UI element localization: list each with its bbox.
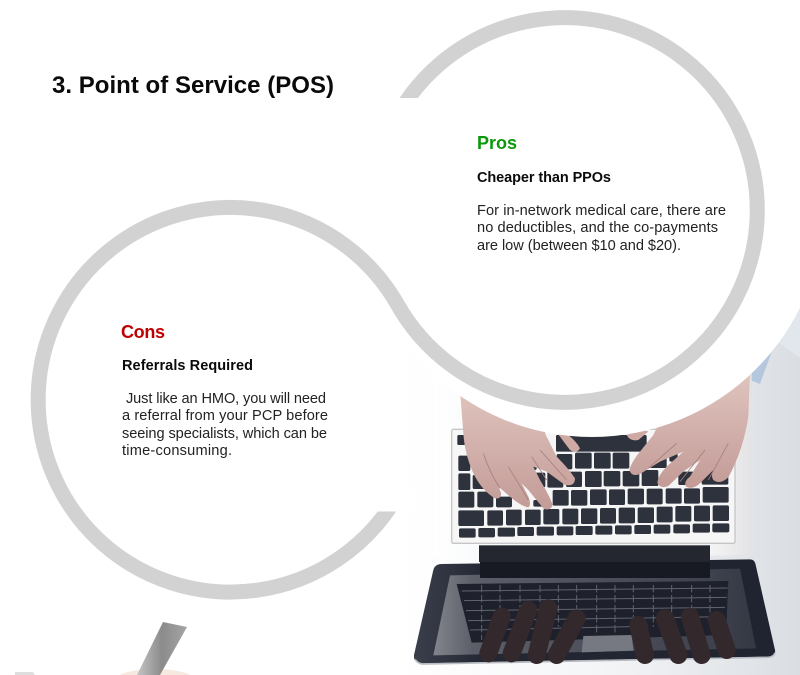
title: 3. Point of Service (POS) — [52, 72, 334, 99]
reflected keyboard — [457, 581, 728, 643]
cons body: time-consuming. — [122, 443, 232, 459]
pros body: no deductibles, and the co-payments — [477, 220, 718, 236]
hinge — [479, 545, 710, 578]
shirt sleeve — [745, 300, 800, 384]
cons body: Just like an HMO, you will need — [126, 391, 326, 407]
cons subheading: Referrals Required — [122, 358, 253, 374]
panel: cons — [121, 322, 328, 459]
desk background — [400, 280, 800, 675]
reflected hands — [488, 608, 727, 655]
panel: pros — [477, 133, 726, 254]
pros subheading: Cheaper than PPOs — [477, 170, 611, 186]
pros body: For in-network medical care, there are — [477, 203, 726, 219]
white circle over photo — [360, 0, 800, 437]
cons body: a referral from your PCP before — [122, 408, 328, 424]
laptop screen — [414, 559, 775, 663]
right hand — [627, 373, 750, 488]
reflected key lines — [462, 585, 728, 640]
cons body — [122, 391, 328, 459]
screen bottom edge — [415, 653, 775, 664]
reflected trackpad — [582, 635, 633, 652]
left hand — [460, 390, 580, 509]
pen and hand at bottom left — [15, 622, 197, 675]
ring end masks — [375, 98, 430, 512]
photo: laptop on desk with typing hands — [400, 280, 800, 675]
keyboard keys — [457, 432, 729, 538]
pros body: are low (between $10 and $20). — [477, 238, 681, 254]
laptop drawn in zoomed coordinates — [414, 373, 775, 664]
cons heading: Cons — [121, 322, 165, 342]
grey S-curve ring — [38, 18, 757, 592]
keyboard well — [452, 429, 735, 543]
screen reflection — [433, 569, 756, 655]
cons body: seeing specialists, which can be — [122, 426, 327, 442]
laptop base — [433, 373, 752, 560]
pros heading: Pros — [477, 133, 517, 153]
pros body — [477, 203, 726, 254]
